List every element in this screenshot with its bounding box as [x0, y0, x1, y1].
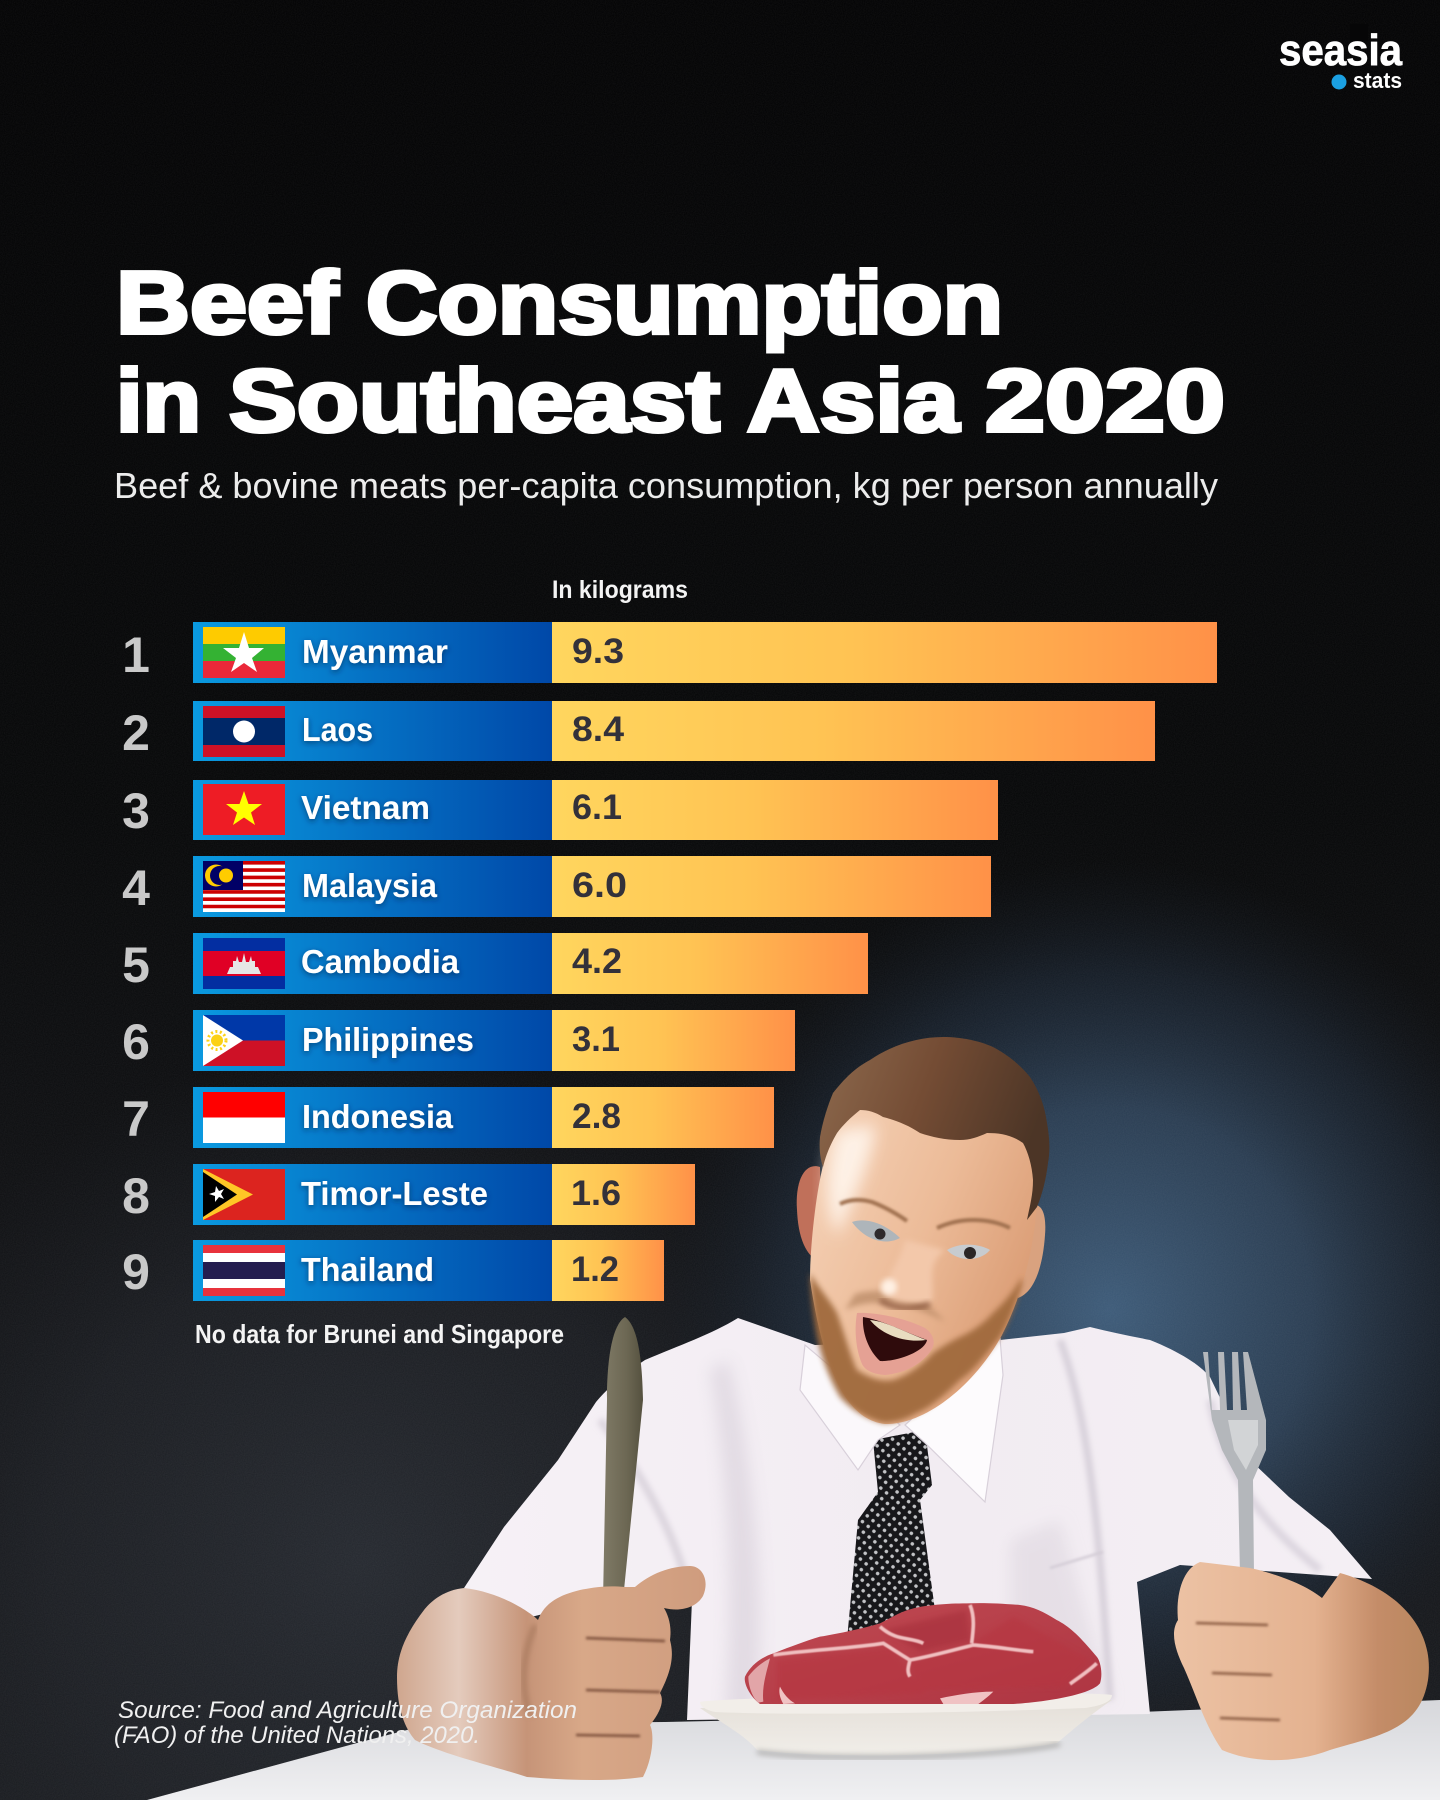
fork — [1203, 1352, 1266, 1575]
axis label: In kilograms — [552, 576, 688, 604]
title: Beef — [116, 253, 339, 352]
flag: Thailand — [203, 1245, 285, 1296]
row: Malaysia — [122, 856, 991, 917]
beard — [810, 1273, 1022, 1423]
logo: seasia stats: stats — [1353, 68, 1402, 93]
title: in — [116, 351, 201, 450]
face — [810, 1100, 1038, 1424]
necktie — [847, 1430, 937, 1640]
row: Philippines: Philippines — [302, 1021, 474, 1058]
row: Malaysia: 4 — [122, 860, 150, 916]
flag: Cambodia — [203, 938, 285, 989]
row: Myanmar — [122, 622, 1217, 683]
photo: man with knife, fork and beef steak — [147, 1037, 1440, 1800]
flag: Timor-Leste — [203, 1169, 285, 1220]
row: Vietnam — [122, 780, 998, 840]
subtitle: Beef & bovine meats per-capita consumption, kg per person annually — [114, 465, 1218, 506]
hair — [820, 1037, 1049, 1220]
row: Myanmar: 9.3 — [572, 632, 624, 671]
source: (FAO) of the United Nations, 2020. — [114, 1722, 480, 1749]
row: Laos — [122, 701, 1155, 761]
beef steak — [745, 1603, 1101, 1704]
row: Cambodia — [122, 933, 868, 994]
row: Vietnam: 6.1 — [572, 788, 622, 827]
flag: Vietnam — [203, 784, 285, 835]
row: Cambodia: 5 — [122, 937, 150, 993]
title — [116, 253, 1225, 450]
eyebrows — [840, 1200, 1010, 1228]
flag: Laos — [203, 706, 285, 757]
logo: seasia stats — [1279, 24, 1402, 93]
collar — [800, 1338, 1003, 1502]
row: Cambodia: 4.2 — [572, 942, 622, 981]
title: Asia — [747, 351, 960, 450]
bar chart — [122, 622, 1217, 1301]
row: Thailand: 1.2 — [571, 1250, 619, 1289]
row: Philippines: 3.1 — [572, 1020, 620, 1059]
note: missing data: No data for Brunei and Singapore — [195, 1319, 564, 1349]
title: Consumption — [366, 253, 1003, 352]
left hand holding knife — [397, 1566, 706, 1780]
row: Indonesia — [122, 1087, 774, 1148]
mouth — [856, 1313, 934, 1375]
row: Malaysia: 6.0 — [572, 866, 627, 905]
row: Thailand — [122, 1240, 664, 1301]
row: Myanmar: 1 — [122, 627, 150, 683]
row: Indonesia: 7 — [122, 1091, 150, 1147]
source — [114, 1697, 577, 1749]
logo: seasia stats: seasia — [1279, 26, 1402, 75]
row: Timor-Leste — [122, 1164, 695, 1225]
title: 2020 — [985, 351, 1225, 450]
logo icon — [1332, 74, 1346, 90]
eyes — [852, 1220, 900, 1241]
plate — [700, 1693, 1112, 1757]
row: Philippines: 6 — [122, 1014, 150, 1070]
row: Philippines — [122, 1010, 795, 1071]
row: Laos: 8.4 — [572, 710, 625, 749]
flag: Malaysia — [203, 861, 285, 912]
nose — [882, 1240, 945, 1304]
row: Myanmar: Myanmar — [302, 633, 448, 670]
row: Thailand: 9 — [122, 1244, 150, 1300]
source: Source: Food and Agriculture Organization — [118, 1697, 577, 1724]
row: Cambodia: Cambodia — [301, 943, 460, 980]
row: Timor-Leste: Timor-Leste — [301, 1175, 488, 1212]
row: Indonesia: 2.8 — [572, 1097, 621, 1136]
row: Laos: Laos — [302, 711, 373, 748]
shirt — [464, 1318, 1372, 1720]
head — [797, 1037, 1049, 1424]
row: Timor-Leste: 8 — [122, 1168, 150, 1224]
right hand holding fork — [1174, 1562, 1429, 1760]
row: Malaysia: Malaysia — [302, 867, 438, 904]
title: Southeast — [229, 351, 720, 450]
table — [147, 1700, 1440, 1800]
row: Indonesia: Indonesia — [302, 1098, 454, 1135]
knife — [603, 1317, 643, 1600]
row: Thailand: Thailand — [301, 1251, 434, 1288]
row: Laos: 2 — [122, 705, 150, 761]
row: Vietnam: 3 — [122, 783, 150, 839]
flag: Indonesia — [203, 1092, 285, 1143]
row: Vietnam: Vietnam — [301, 789, 430, 826]
flag: Philippines — [203, 1015, 285, 1066]
row: Timor-Leste: 1.6 — [571, 1174, 621, 1213]
ears — [797, 1166, 822, 1262]
flag: Myanmar — [203, 627, 285, 678]
